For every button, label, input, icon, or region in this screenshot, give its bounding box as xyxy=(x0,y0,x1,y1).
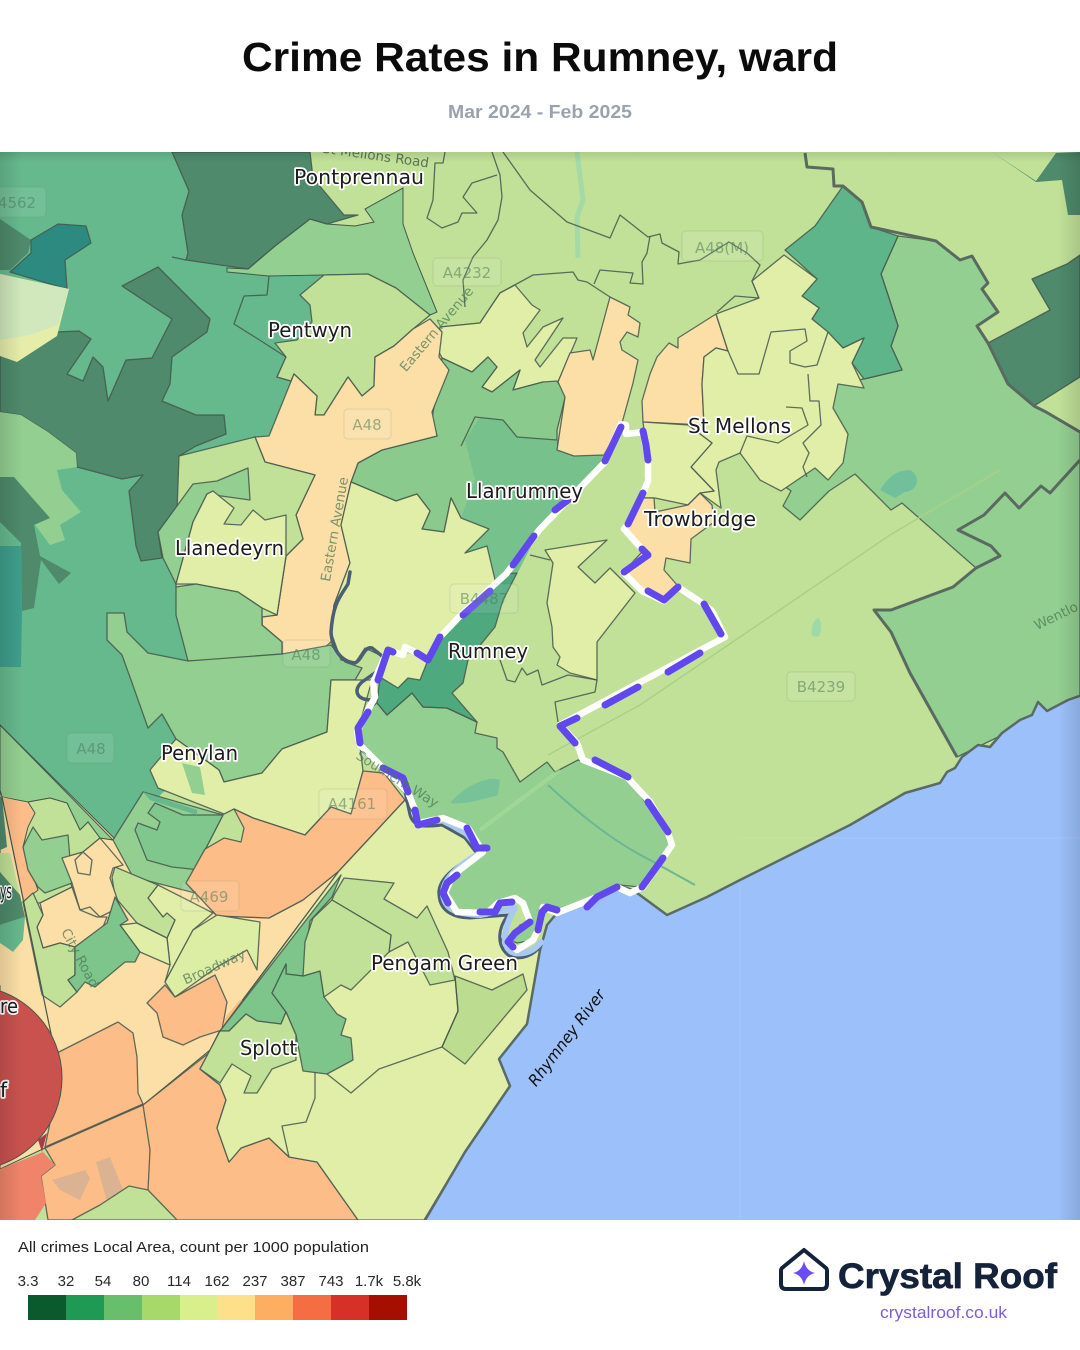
legend scale labels: 80 xyxy=(133,1273,149,1290)
road shields: B4487 xyxy=(460,590,508,608)
legend xyxy=(18,1239,422,1320)
place name labels: f xyxy=(0,1078,8,1102)
road shields: A48(M) xyxy=(695,239,749,257)
place name labels: Penylan xyxy=(161,741,238,765)
road shields xyxy=(0,187,855,911)
map area: north-central wards xyxy=(255,152,760,654)
place name labels: Pentwyn xyxy=(268,318,352,342)
map area: west green base xyxy=(0,152,437,838)
subtitle: date range: Mar 2024 - Feb 2025 xyxy=(448,101,632,122)
legend colour bar xyxy=(28,1295,407,1320)
place name labels: Llanedeyrn xyxy=(175,536,284,560)
road shields: A4232 xyxy=(443,264,491,282)
river Rhymney xyxy=(331,572,541,958)
road shields: A469 xyxy=(190,888,228,906)
place name labels: St Mellons xyxy=(688,414,791,438)
road shields: A4161 xyxy=(328,795,376,813)
legend scale labels: 162 xyxy=(204,1273,230,1290)
road name labels: Rhymney River xyxy=(524,985,610,1090)
road shields: A48 xyxy=(352,416,382,434)
map area: south-west wards xyxy=(0,680,405,1220)
county boundary lines xyxy=(805,153,1080,757)
place name labels xyxy=(0,165,791,1102)
road name labels: Wentlo xyxy=(1032,599,1080,634)
road name labels xyxy=(57,141,1080,1090)
sea: Bristol Channel xyxy=(424,694,1080,1222)
place name labels: Trowbridge xyxy=(643,507,756,531)
legend scale labels: 32 xyxy=(58,1273,74,1290)
legend scale labels: 54 xyxy=(95,1273,111,1290)
place name labels: ys xyxy=(0,879,12,903)
road name labels: St Mellons Road xyxy=(321,141,430,171)
road shields: A48 xyxy=(76,740,106,758)
road shields: A48 xyxy=(291,646,321,664)
place name labels: Pontprennau xyxy=(294,165,424,189)
map area: Pengam and Splott wards xyxy=(200,800,540,1220)
legend scale labels: 387 xyxy=(280,1273,306,1290)
logo wordmark: Crystal Roof xyxy=(838,1257,1057,1296)
legend scale labels: 1.7k xyxy=(355,1273,384,1290)
legend scale labels: 237 xyxy=(242,1273,268,1290)
road name labels: City Road xyxy=(57,926,102,990)
title: Crime Rates in Rumney, ward xyxy=(242,34,838,80)
legend scale labels: 5.8k xyxy=(393,1273,422,1290)
map area: Llanedeyrn wards xyxy=(107,437,362,782)
icon: house with star xyxy=(781,1250,827,1289)
place name labels: Splott xyxy=(240,1036,297,1060)
place name labels: Llanrumney xyxy=(466,479,583,503)
legend scale labels xyxy=(18,1273,422,1290)
legend title: All crimes Local Area, count per 1000 population xyxy=(18,1239,369,1256)
road name labels: Southern Way xyxy=(353,748,441,811)
legend scale labels: 114 xyxy=(167,1273,191,1290)
ward boundary: Rumney xyxy=(357,424,725,950)
road shields: B4239 xyxy=(797,678,845,696)
place name labels: Pengam Green xyxy=(371,951,518,975)
map area: Rumney ward core xyxy=(331,482,695,943)
road name labels: Broadway xyxy=(181,946,248,988)
place name labels: Rumney xyxy=(448,639,528,663)
map area: east wards xyxy=(500,152,1080,757)
website url: crystalroof.co.uk xyxy=(880,1304,1008,1322)
legend scale labels: 3.3 xyxy=(18,1273,38,1290)
road name labels: Eastern Avenue xyxy=(397,284,477,375)
legend scale labels: 743 xyxy=(318,1273,344,1290)
logo: Crystal Roof xyxy=(781,1250,1057,1322)
road name labels: Eastern Avenue xyxy=(318,476,352,583)
place name labels: re xyxy=(0,994,18,1018)
